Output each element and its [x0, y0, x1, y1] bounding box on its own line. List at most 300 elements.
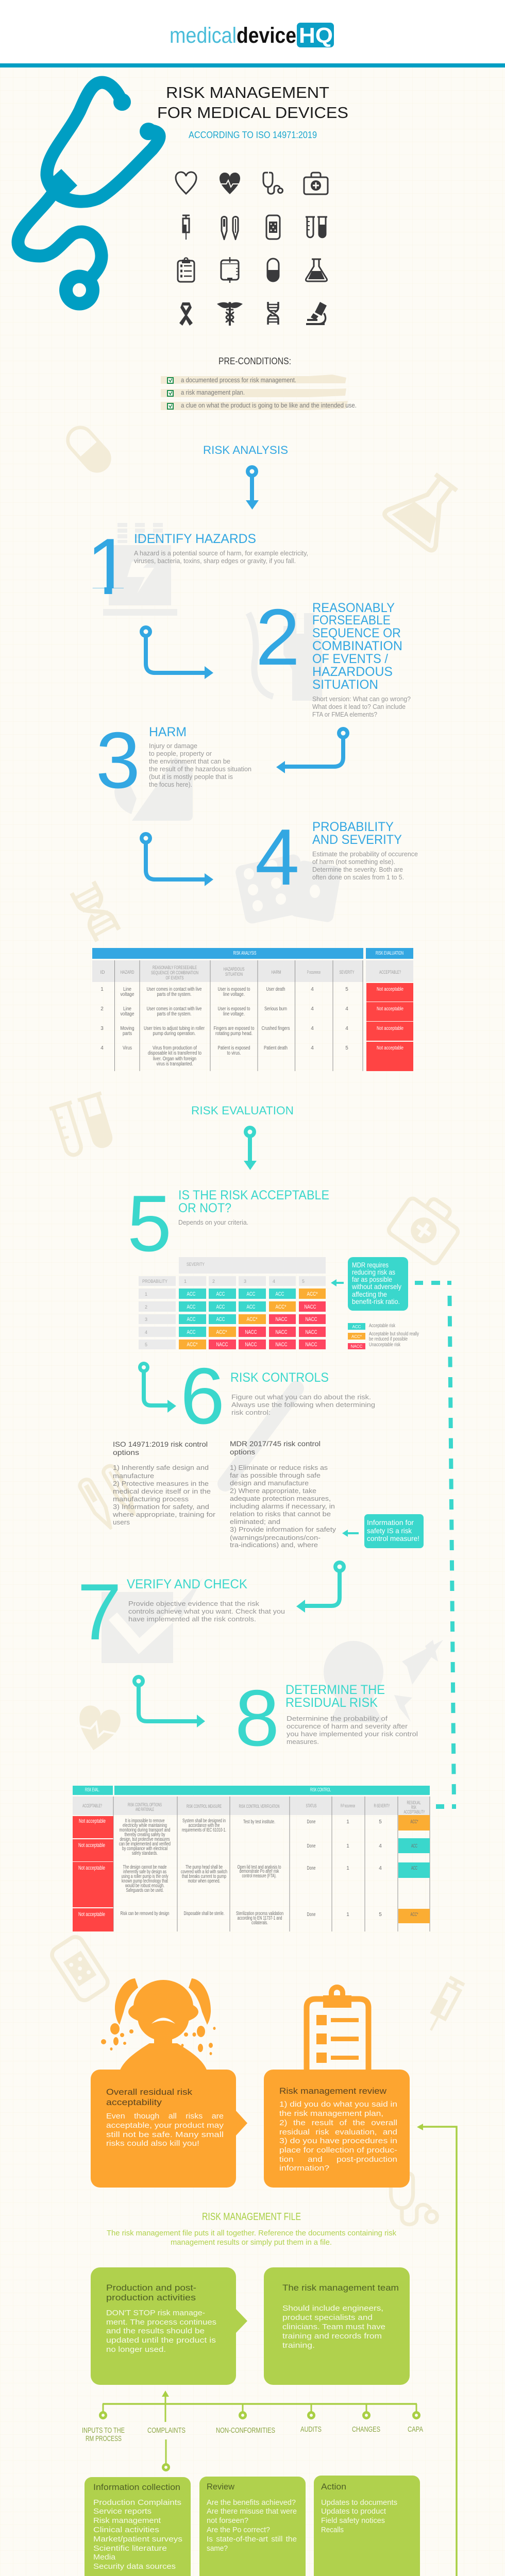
matrix row 1	[179, 1289, 326, 1299]
matrix row 4: NACC	[305, 1329, 317, 1335]
step 3: harm: Injury or damage	[149, 742, 197, 750]
callout: MDR requirement: far as possible	[352, 1275, 392, 1283]
step 8: residual risk: Determinine the probability of	[287, 1715, 388, 1722]
table: risk control: Done	[307, 1843, 316, 1849]
callout: information for safety: Information for	[367, 1518, 414, 1527]
callout: MDR requirement: reducing risk as	[352, 1268, 395, 1276]
panel: action	[314, 2476, 420, 2576]
table: risk analysis: 5	[345, 1045, 348, 1051]
table: risk control: motor when opened.	[188, 1878, 221, 1884]
step 7: verify and check: controls achieve what you want. Check that you	[128, 1607, 285, 1615]
watermark: thermometers	[78, 1464, 139, 1530]
step 2: foreseeable sequence: What does it lead to? Can include	[312, 703, 406, 710]
risk control options: MDR 2017/745: 3) Provide information for safety	[230, 1526, 336, 1533]
table: risk control	[73, 1786, 430, 1931]
panel: risk management review: residual risk evaluation, and	[279, 2128, 397, 2137]
table: risk control: 1	[346, 1819, 349, 1825]
table: risk analysis: 4	[311, 1026, 314, 1031]
legend: Acceptable but should really	[369, 1331, 419, 1337]
panel: information collection: Scientific literature	[93, 2544, 167, 2553]
table: risk control: can be implemented and verified	[119, 1841, 171, 1847]
table: risk control: Done	[307, 1819, 316, 1825]
panel: risk management review: 3) do you have procedures in	[279, 2137, 397, 2145]
table: risk control: monitoring during transport and	[120, 1827, 170, 1833]
table: risk control: Risk can be removed by design	[121, 1911, 169, 1917]
step 8: residual risk: RESIDUAL RISK	[285, 1696, 378, 1710]
table: risk analysis: 4	[311, 987, 314, 992]
step 4: probability and severity: Estimate the probability of occurence	[312, 850, 418, 858]
matrix row 3: ACC	[216, 1316, 225, 1323]
risk control options: ISO 14971: manufacturing process	[113, 1495, 189, 1503]
risk control options: MDR 2017/745: including alarms if necessary, in	[230, 1502, 335, 1510]
step 8: residual risk: DETERMINE THE	[285, 1683, 385, 1697]
step 3: harm: the environment that can be	[149, 757, 230, 765]
risk matrix	[139, 1257, 326, 1349]
step 7: verify and check	[77, 1567, 285, 1663]
table: risk analysis: SEVERITY	[339, 970, 355, 975]
table: risk analysis: Line	[123, 1006, 131, 1012]
inputs connector tree	[100, 2391, 419, 2470]
arrow: step 6 to 7	[296, 1561, 346, 1613]
table: risk control: The design cannot be made	[123, 1865, 167, 1870]
panel: action: Action	[321, 2482, 346, 2492]
panel: risk management review: 1) did you do what you said in	[279, 2100, 397, 2109]
input labels: COMPLAINTS	[147, 2426, 186, 2435]
step 1: identify hazards: viruses, bacteria, toxins, sharp edges or gravity, if you fall.	[134, 557, 296, 565]
table: risk control: accordance with the	[189, 1823, 220, 1828]
table: risk control: Test by test institute.	[243, 1819, 275, 1825]
icon grid	[176, 172, 328, 326]
matrix row 2: ACC	[216, 1304, 225, 1310]
step 3: harm: the result of the hazardous situation	[149, 765, 251, 773]
panel: production and post-production activities: ment. The process continues	[106, 2318, 216, 2327]
callout: MDR requirement: without adversely	[351, 1282, 401, 1291]
panel: the risk management team	[264, 2267, 410, 2385]
panel: production and post-production activities: and the results should be	[106, 2327, 205, 2335]
step 2: foreseeable sequence: Short version: What can go wrong?	[312, 695, 411, 703]
arrow: callout to options	[342, 1530, 359, 1537]
heading: risk management file	[107, 2211, 396, 2247]
risk control options: MDR 2017/745: options	[230, 1448, 255, 1456]
white header with logo	[0, 0, 505, 63]
matrix row 4: NACC	[275, 1329, 288, 1335]
table: risk analysis: HAZARD	[121, 970, 134, 975]
risk matrix: 4	[273, 1279, 275, 1284]
step 3: harm: to people, property or	[149, 750, 212, 757]
step 6: risk controls	[180, 1351, 375, 1484]
risk control options: MDR 2017/745: 1) Eliminate or reduce risks as	[230, 1464, 328, 1471]
table: risk analysis: RISK EVALUATION	[376, 951, 403, 956]
table: risk control: RISK	[411, 1805, 416, 1810]
icon: tools	[225, 1388, 296, 1484]
legend: NACC	[351, 1344, 363, 1349]
risk matrix: 5	[145, 1342, 147, 1347]
pre-conditions: a clue on what the product is going to be like and the intended use.	[181, 402, 357, 409]
table: risk control: covered with a lid with switch	[181, 1869, 227, 1875]
icon: dice	[234, 853, 342, 925]
matrix row 1: ACC*	[307, 1291, 318, 1297]
matrix row 1: ACC	[275, 1291, 284, 1297]
icon: person with bolts	[324, 1640, 443, 1722]
icon: electrical hazard	[103, 523, 177, 616]
matrix row 3: ACC	[187, 1316, 196, 1323]
panel: the risk management team: Should include engineers,	[282, 2304, 383, 2313]
table: risk control: Not acceptable	[78, 1911, 105, 1918]
table: risk analysis: Not acceptable	[377, 1026, 403, 1031]
step 8: residual risk: measures.	[287, 1738, 319, 1745]
panel: action: Field safety notices	[321, 2516, 385, 2525]
legend: Unacceptable risk	[369, 1342, 401, 1348]
arrow: step 1 to 2	[140, 625, 213, 679]
table: risk control: 1	[346, 1866, 349, 1871]
risk control options: ISO 14971: ISO 14971:2019 risk control	[113, 1440, 208, 1448]
table: risk control: ACC*	[410, 1912, 418, 1918]
table: risk control: ACC	[411, 1843, 417, 1849]
table: risk control: 4	[379, 1843, 382, 1849]
table: risk analysis: User death	[266, 987, 285, 992]
table: risk control: Sterilization process validation	[236, 1911, 283, 1917]
callout: information for safety	[364, 1514, 424, 1548]
icon: injured hand	[114, 757, 193, 821]
panel: action: Recalls	[321, 2526, 344, 2534]
step 2: foreseeable sequence	[248, 592, 411, 718]
table: risk analysis: line voltage.	[223, 992, 245, 997]
table: risk control: Not acceptable	[78, 1842, 105, 1849]
table: risk control: STATUS	[306, 1803, 316, 1808]
panel: production and post-production activities	[91, 2267, 247, 2385]
table: risk control: would be robust enough.	[125, 1883, 164, 1889]
panel: production and post-production activities: no longer used.	[106, 2345, 166, 2354]
large stethoscope illustration	[18, 82, 159, 304]
table: risk control: Open lid test and analysis to	[237, 1865, 281, 1870]
table: risk analysis: 4	[311, 1006, 314, 1012]
matrix row 5: NACC	[275, 1342, 288, 1348]
step 7: verify and check: 7	[77, 1567, 122, 1656]
risk control options: MDR 2017/745: far as possible through safe	[230, 1471, 321, 1479]
table: risk analysis: SEQUENCE OR COMBINATION	[151, 970, 198, 975]
step 2: foreseeable sequence: REASONABLY	[312, 601, 395, 615]
risk control options: ISO 14971: 3) Information for safety, and	[113, 1503, 209, 1511]
table: risk analysis: Patient death	[264, 1045, 288, 1051]
panel: overall residual risk acceptability: still not be safe. Many small	[106, 2130, 224, 2139]
matrix row 3: ACC*	[246, 1316, 258, 1323]
matrix row 1: ACC	[246, 1291, 256, 1297]
heading: risk management file: management results or simply put them in a file.	[171, 2238, 332, 2247]
panel: the risk management team: clinicians. Team must have	[282, 2323, 385, 2331]
panel: review: same?	[207, 2544, 228, 2553]
table: risk control: 1	[346, 1912, 349, 1918]
panel: the risk management team: The risk management team	[282, 2283, 399, 2293]
risk control options: ISO 14971	[112, 1440, 216, 1526]
table: risk control: 5	[379, 1912, 382, 1918]
table: risk control: RISK CONTROL VERIFICATION	[239, 1804, 279, 1809]
table: risk control: ACCEPTABILITY	[404, 1809, 425, 1815]
step 1: identify hazards: IDENTIFY HAZARDS	[134, 532, 256, 546]
table: risk analysis: Fingers are exposed to	[213, 1026, 255, 1031]
table: risk analysis: Serious burn	[264, 1006, 287, 1012]
step 7: verify and check: Provide objective evidence that the risk	[128, 1600, 260, 1607]
panel: risk management review: the risk management plan,	[279, 2109, 383, 2118]
table: risk analysis	[92, 948, 413, 1071]
table: risk control: known pump technology that	[122, 1878, 168, 1884]
table: risk analysis: HARM	[271, 970, 281, 975]
arrow: step 5 to 6	[138, 1362, 176, 1413]
step 3: harm: the focus here).	[149, 781, 192, 788]
watermark: syringe	[424, 1977, 464, 2034]
step 2: foreseeable sequence: FTA or FMEA elements?	[312, 710, 377, 718]
icon: hand and cable	[248, 613, 322, 701]
table: risk control: ACC	[411, 1866, 417, 1871]
table: risk control: requirements of IEC 61010-1.	[182, 1827, 226, 1833]
clipboard illustration	[307, 1985, 368, 2071]
risk control options: MDR 2017/745: 2) Where appropriate, take	[230, 1487, 316, 1495]
matrix row 5: ACC*	[187, 1342, 198, 1348]
table: risk control: collaterals.	[251, 1920, 268, 1926]
step 2: foreseeable sequence: OF EVENTS /	[312, 652, 388, 666]
matrix row 2: ACC	[187, 1304, 196, 1310]
matrix row 3	[179, 1314, 326, 1324]
table: risk control: RISK EVAL.	[85, 1787, 99, 1793]
panel: information collection: Security data sources	[93, 2562, 176, 2571]
table: risk control: Done	[307, 1912, 316, 1918]
panel: overall residual risk acceptability: acceptable, your product may	[106, 2121, 224, 2130]
table: risk control: ACCEPTABLE?	[82, 1803, 102, 1808]
table: risk control: 1	[346, 1843, 349, 1849]
step 6: risk controls: Figure out what you can do about the risk.	[231, 1393, 371, 1401]
table: risk analysis: User comes in contact with live	[146, 987, 202, 992]
callout: information for safety: safety IS a risk	[367, 1527, 412, 1535]
panel: information collection	[85, 2477, 191, 2576]
panel: the risk management team: training.	[282, 2341, 315, 2350]
table: risk analysis: 2	[100, 1006, 104, 1012]
step 2: foreseeable sequence: HAZARDOUS	[312, 665, 393, 679]
watermark: stethoscope	[391, 2174, 437, 2225]
matrix row 2: ACC	[246, 1304, 256, 1310]
table: risk control: demonstrate Po after risk	[239, 1869, 279, 1874]
matrix row 2: NACC	[304, 1304, 316, 1310]
heading: risk analysis: RISK ANALYSIS	[203, 444, 288, 456]
callout: MDR requirement: affecting the	[352, 1290, 387, 1298]
panel: overall residual risk acceptability: Even though all risks are	[106, 2112, 224, 2121]
step 5: is the risk acceptable	[127, 1179, 329, 1268]
legend: Acceptable risk	[369, 1323, 396, 1329]
matrix row 5: NACC	[305, 1342, 317, 1348]
step 4: probability and severity: PROBABILITY	[312, 820, 394, 834]
heading: risk evaluation: RISK EVALUATION	[191, 1104, 294, 1117]
matrix row 4: NACC	[245, 1329, 257, 1335]
watermark: bandage	[49, 1934, 111, 2003]
step 4: probability and severity: often done on scales from 1 to 5.	[312, 873, 404, 881]
risk control options: MDR 2017/745: design and manufacture	[230, 1479, 309, 1487]
table: risk analysis: 4	[345, 1026, 348, 1031]
input labels: CHANGES	[352, 2425, 380, 2434]
panel: overall residual risk acceptability	[91, 2070, 247, 2188]
step 7: verify and check: VERIFY AND CHECK	[127, 1577, 247, 1591]
table: risk control: by compliance with electrical	[122, 1846, 167, 1852]
panel: information collection: Media	[93, 2553, 116, 2562]
table: risk analysis: User tries to adjust tubing in roller	[144, 1026, 205, 1031]
panel: risk management review: 2) the result of the overall	[279, 2119, 397, 2127]
table: risk analysis: User is exposed to	[217, 987, 250, 992]
callout: information for safety: control measure!	[367, 1534, 419, 1543]
table: risk control: System shall be designed in	[182, 1818, 226, 1824]
panel: review: Is state-of-the-art still the	[207, 2535, 297, 2544]
panel: risk management review: information?	[279, 2164, 329, 2173]
step 2: foreseeable sequence: SITUATION	[312, 677, 378, 692]
heading: risk management file: RISK MANAGEMENT FILE	[202, 2211, 301, 2223]
matrix row 1: ACC	[187, 1291, 196, 1297]
risk control options: ISO 14971: users	[113, 1518, 130, 1526]
matrix row 4: ACC*	[216, 1329, 227, 1335]
panel: risk management review: place for collection of produc-	[279, 2146, 397, 2155]
step 4: probability and severity	[234, 812, 418, 925]
table: risk analysis: virus is transplanted.	[157, 1061, 193, 1067]
panel: overall residual risk acceptability: acceptability	[106, 2097, 162, 2107]
table: risk control: RISK CONTROL	[310, 1787, 331, 1793]
matrix row 2: ACC*	[275, 1304, 287, 1310]
table: risk analysis: Virus	[123, 1045, 132, 1051]
pre-conditions: a documented process for risk management.	[181, 377, 296, 384]
dashed feedback line	[415, 1281, 456, 1809]
teal header rule	[0, 63, 505, 67]
step 8: residual risk: 8	[235, 1673, 279, 1762]
logo: medical device HQ	[170, 23, 334, 48]
table: risk analysis: HAZARDOUS	[224, 967, 244, 972]
table: risk analysis: disposable kit is transferred to	[148, 1050, 201, 1056]
panel: information collection: Production Complaints	[93, 2498, 181, 2507]
table: risk analysis: voltage	[121, 1011, 134, 1017]
arrow: step 2 to 3	[276, 727, 349, 773]
legend: ACC*	[351, 1334, 362, 1339]
step 3: harm: (but it is mostly people that is	[149, 773, 233, 781]
table: risk control: thereby creating safety by	[125, 1832, 165, 1838]
matrix row 5: NACC	[245, 1342, 257, 1348]
panel: review: Review	[207, 2482, 235, 2492]
risk matrix: 5	[302, 1279, 305, 1284]
table: risk control: 4	[379, 1866, 382, 1871]
table: risk analysis: Crushed fingers	[262, 1026, 290, 1031]
input labels: AUDITS	[300, 2425, 322, 2434]
step 2: foreseeable sequence: COMBINATION	[312, 639, 402, 653]
risk control options: MDR 2017/745: tra-indications) and, where	[230, 1541, 318, 1549]
table: risk analysis: Not acceptable	[377, 987, 403, 992]
legend: be reduced if possible	[369, 1336, 408, 1342]
table: risk analysis: rotating pump head.	[215, 1031, 252, 1037]
table: risk analysis: Moving	[121, 1026, 134, 1031]
risk control options: ISO 14971: medical device itself or in the	[113, 1487, 211, 1495]
risk matrix: 3	[145, 1317, 147, 1322]
table: risk control: It is impossible to remove	[125, 1818, 165, 1824]
table: risk control: electricity while maintaining	[123, 1823, 167, 1828]
subtitle: ACCORDING TO ISO 14971:2019	[189, 130, 317, 140]
panel: review: Are the Po correct?	[207, 2526, 270, 2534]
step 5: is the risk acceptable: 5	[127, 1179, 172, 1268]
panel: production and post-production activities: production activities	[106, 2293, 196, 2302]
panel: risk management review	[264, 2070, 410, 2188]
step 3: harm: 3	[96, 716, 140, 805]
step 4: probability and severity: of harm (not something else).	[312, 858, 395, 866]
risk matrix: 2	[145, 1304, 147, 1310]
table: risk control: Disposable shall be sterile.	[183, 1911, 225, 1917]
table: risk analysis: voltage	[121, 992, 134, 997]
table: risk analysis: REASONABLY FORESEEABLE	[153, 965, 197, 970]
table: risk control: AND RATIONALE	[136, 1807, 154, 1812]
risk control options: MDR 2017/745: (warnings/precautions/con-	[230, 1534, 321, 1541]
table: risk analysis: Line	[123, 987, 131, 992]
table: risk analysis: SITUATION	[225, 972, 243, 977]
table: risk analysis: line voltage.	[223, 1011, 245, 1017]
panel: review	[199, 2477, 306, 2576]
input labels: INPUTS TO THE	[82, 2426, 125, 2435]
step 3: harm	[96, 716, 251, 821]
table: risk control: The pump head shall be	[186, 1865, 223, 1870]
step 8: residual risk: you have implemented your risk control	[287, 1730, 418, 1738]
panel: review: Are the benefits achieved?	[207, 2498, 296, 2507]
risk control options: MDR 2017/745	[230, 1439, 336, 1549]
callout: MDR requirement: benefit-risk ratio.	[352, 1297, 400, 1306]
step 5: is the risk acceptable: OR NOT?	[178, 1201, 231, 1215]
risk matrix: 3	[244, 1279, 246, 1284]
input labels	[82, 2425, 423, 2443]
table: risk analysis: User comes in contact with live	[146, 1006, 202, 1012]
table: risk analysis: pump during operation.	[153, 1031, 196, 1037]
table: risk control: Not acceptable	[78, 1865, 105, 1871]
heading: risk management file: The risk management file puts it all together. Reference the documents containing risk	[107, 2229, 396, 2238]
risk control options: ISO 14971: 2) Protective measures in the	[113, 1480, 209, 1487]
table: risk control: RISK CONTROL MEASURE	[187, 1804, 222, 1809]
table: risk analysis: 4	[345, 1006, 348, 1012]
step 4: probability and severity: 4	[255, 812, 299, 902]
step 6: risk controls: Always use the following when determining	[231, 1401, 375, 1409]
table: risk analysis: 3	[100, 1026, 104, 1031]
panel: the risk management team: training and records from	[282, 2332, 382, 2341]
table: risk analysis: 4	[311, 1045, 314, 1051]
logo: medical device HQ: device	[237, 23, 296, 48]
risk control options: ISO 14971: manufacture	[113, 1472, 154, 1480]
panel: information collection: Clinical activities	[93, 2526, 159, 2534]
arrow: step 3 to 4	[140, 832, 213, 886]
table: risk analysis: parts of the system.	[157, 1011, 192, 1017]
table: risk control: RESIDUAL	[407, 1800, 420, 1805]
risk control options: MDR 2017/745: MDR 2017/745 risk control	[230, 1439, 321, 1448]
matrix row 5: NACC	[216, 1342, 228, 1348]
panel: review: Are there misuse that were	[207, 2507, 297, 2516]
risk control options: MDR 2017/745: adequate protection measures,	[230, 1495, 331, 1502]
table: risk analysis: User is exposed to	[217, 1006, 250, 1012]
risk control options: MDR 2017/745: relation to risks that cannot be	[230, 1510, 331, 1518]
step 1: identify hazards: 1	[87, 522, 131, 611]
step 3: harm: HARM	[149, 725, 187, 739]
step 2: foreseeable sequence: 2	[256, 592, 300, 682]
step 6: risk controls: 6	[180, 1351, 225, 1440]
watermark: broken heart	[71, 1703, 125, 1755]
matrix row 3: NACC	[275, 1316, 288, 1323]
table: risk analysis: 4	[100, 1045, 104, 1051]
table: risk control: according to EN 11737-1 and	[237, 1916, 282, 1921]
panel: action: Updates to product	[321, 2507, 386, 2516]
table: risk control: Safeguards can be used.	[126, 1888, 164, 1893]
watermark: pill	[63, 422, 114, 476]
table: risk control: using a roller pump is the only	[122, 1874, 168, 1879]
pre-conditions: PRE-CONDITIONS:	[218, 356, 291, 366]
table: risk analysis: parts of the system.	[157, 992, 192, 997]
table: risk control: Done	[307, 1866, 316, 1871]
title	[157, 83, 348, 140]
panel: production and post-production activities: Production and post-	[106, 2283, 196, 2293]
risk matrix: PROBABILITY	[142, 1279, 167, 1284]
step 8: residual risk	[235, 1640, 443, 1762]
arrow: callout to matrix	[331, 1279, 344, 1286]
